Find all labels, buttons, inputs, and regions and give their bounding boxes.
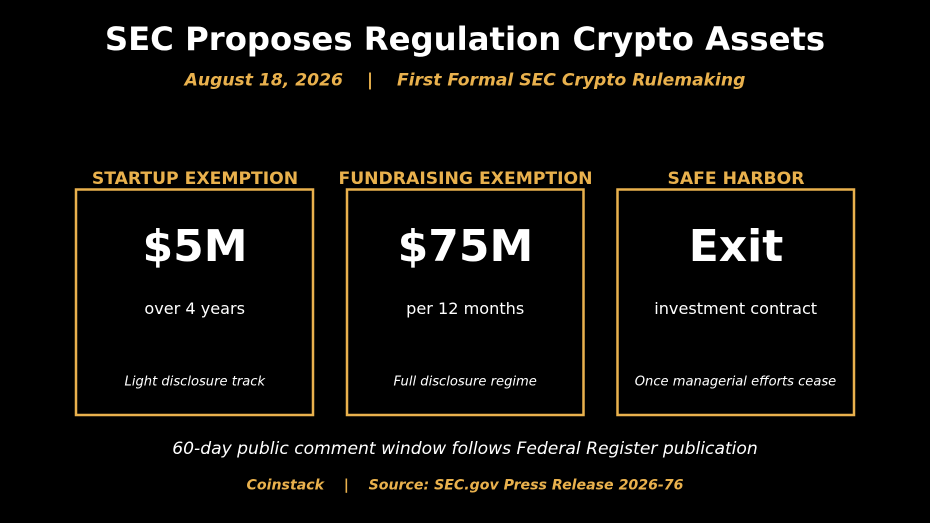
subtitle: August 18, 2026 | First Formal SEC Crypto Rulemaking: [183, 70, 745, 90]
panel box: startup exemption: [76, 190, 313, 415]
big value: $5M: $5M: [142, 221, 248, 272]
panel heading: startup exemption: STARTUP EXEMPTION: [92, 169, 298, 189]
comment window note: 60-day public comment window follows Federal Register publication: [172, 439, 758, 459]
note: full disclosure regime: Full disclosure regime: [394, 374, 537, 390]
big value: $75M: $75M: [398, 221, 533, 272]
period: investment contract: investment contract: [654, 299, 817, 318]
note: light disclosure track: Light disclosure track: [125, 374, 266, 390]
period: per 12 months: per 12 months: [406, 299, 524, 318]
title: SEC Proposes Regulation Crypto Assets: [105, 20, 825, 58]
panel: safe harbor: [618, 169, 854, 415]
panel heading: fundraising exemption: FUNDRAISING EXEMPTION: [338, 169, 593, 189]
note: once managerial efforts cease: Once managerial efforts cease: [635, 374, 836, 390]
panel box: safe harbor: [618, 190, 854, 415]
panel: startup exemption: [76, 169, 313, 415]
panel heading: safe harbor: SAFE HARBOR: [667, 169, 805, 189]
footer source line: Coinstack | Source: SEC.gov Press Release 2026-76: [247, 478, 684, 494]
big value: Exit: Exit: [689, 221, 783, 272]
panel box: fundraising exemption: [347, 190, 584, 415]
panel: fundraising exemption: [338, 169, 593, 415]
period: over 4 years: over 4 years: [144, 299, 245, 318]
